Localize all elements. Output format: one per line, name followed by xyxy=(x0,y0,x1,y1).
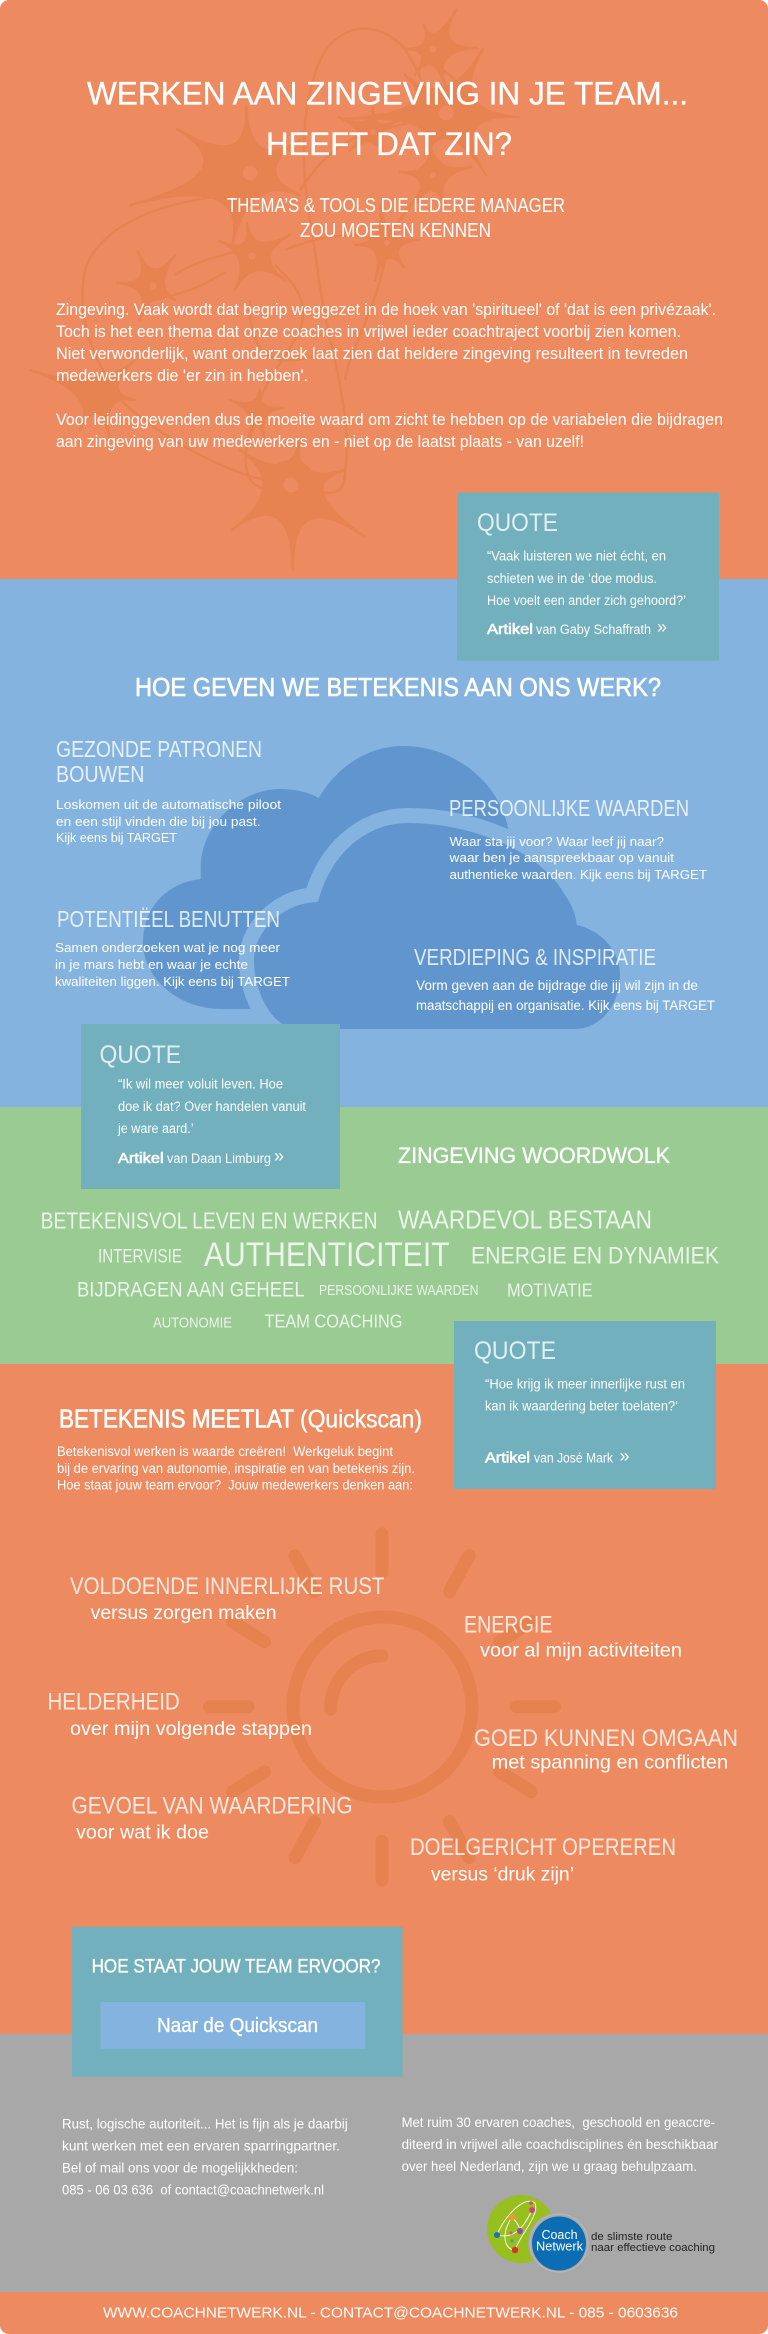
text: right column: Met ruim 30 ervaren coaches, geschoold en geaccre- xyxy=(402,2114,715,2130)
item: helderheid xyxy=(49,1693,311,1739)
quote box 3: kan ik waardering beter toelaten?’ xyxy=(485,1399,678,1414)
title xyxy=(86,82,686,156)
quote box 1: schieten we in de ‘doe modus. xyxy=(487,571,657,586)
quote box 3: van José Mark xyxy=(534,1451,613,1466)
text: right column: over heel Nederland, zijn we u graag behulpzaam. xyxy=(402,2158,697,2174)
item: helderheid: over mijn volgende stappen xyxy=(70,1718,312,1740)
panel: betekenis xyxy=(0,579,768,1107)
word cloud: MOTIVATIE xyxy=(507,1280,593,1301)
quote box 3: Artikel xyxy=(485,1451,530,1467)
item: potentieel benutten: Samen onderzoeken wat je nog meer xyxy=(55,940,281,955)
intro text xyxy=(57,1444,415,1493)
intro text xyxy=(56,301,723,451)
call to action box xyxy=(72,1927,402,2077)
item: spanning xyxy=(475,1729,736,1772)
item: gezonde patronen: Kijk eens bij TARGET xyxy=(56,830,177,845)
subtitle xyxy=(227,198,564,237)
panel: intro xyxy=(0,0,768,579)
item: gezonde patronen: BOUWEN xyxy=(56,761,144,787)
item: persoonlijke waarden: PERSOONLIJKE WAARDEN xyxy=(449,795,689,821)
item: doelgericht: versus ‘druk zijn’ xyxy=(431,1864,574,1886)
heading: (Quickscan) xyxy=(300,1406,422,1434)
item: energie xyxy=(466,1616,681,1660)
heading: BETEKENIS MEETLAT xyxy=(59,1406,294,1434)
intro text: Zingeving. Vaak wordt dat begrip weggezet in de hoek van 'spiritueel' of 'dat is een privézaak'. xyxy=(56,301,716,319)
icon: sun xyxy=(210,1534,554,1880)
item: gezonde patronen: en een stijl vinden die bij jou past. xyxy=(56,814,260,829)
word cloud xyxy=(41,1205,719,1332)
quote box 1: van Gaby Schaffrath xyxy=(536,622,651,637)
word cloud: BIJDRAGEN AAN GEHEEL xyxy=(77,1279,305,1302)
quote box 1 xyxy=(457,492,719,661)
item: persoonlijke waarden: Waar sta jij voor? Waar leef jij naar? xyxy=(450,834,664,849)
word cloud: ENERGIE EN DYNAMIEK xyxy=(471,1243,719,1270)
panel: contact xyxy=(0,2034,768,2292)
panel: woordwolk xyxy=(0,1107,768,1364)
call to action box: HOE STAAT JOUW TEAM ERVOOR? xyxy=(92,1956,381,1978)
logo: naar effectieve coaching xyxy=(591,2242,715,2254)
item: innerlijke rust: VOLDOENDE INNERLIJKE RUST xyxy=(70,1573,385,1600)
intro text: Niet verwonderlijk, want onderzoek laat zien dat heldere zingeving resulteert in tevreden xyxy=(56,345,688,363)
quote box 3: “Hoe krijg ik meer innerlijke rust en xyxy=(485,1377,685,1392)
word cloud: AUTHENTICITEIT xyxy=(204,1236,450,1274)
word cloud: TEAM COACHING xyxy=(264,1311,402,1332)
heading: ZINGEVING WOORDWOLK xyxy=(398,1143,670,1168)
item: energie: voor al mijn activiteiten xyxy=(480,1639,682,1661)
quote box 2: Artikel xyxy=(118,1151,164,1167)
quote box 1: Artikel xyxy=(487,622,533,638)
button: Naar de Quickscan xyxy=(157,2015,318,2037)
subtitle: ZOU MOETEN KENNEN xyxy=(300,220,491,242)
item: gezonde patronen: Loskomen uit de automatische piloot xyxy=(56,797,281,812)
text: left column: Bel of mail ons voor de mogelijkkheden: xyxy=(62,2159,298,2175)
text: left column: kunt werken met een ervaren sparringpartner. xyxy=(62,2137,340,2153)
subtitle: THEMA’S & TOOLS DIE IEDERE MANAGER xyxy=(227,195,565,217)
item: persoonlijke waarden: waar ben je aanspreekbaar op vanuit xyxy=(448,850,674,865)
word cloud: WAARDEVOL BESTAAN xyxy=(398,1205,652,1235)
intro text: bij de ervaring van autonomie, inspiratie en van betekenis zijn. xyxy=(57,1461,415,1476)
item: waardering: voor wat ik doe xyxy=(76,1822,209,1844)
word cloud: INTERVISIE xyxy=(98,1246,182,1268)
item: verdieping en inspiratie: Vorm geven aan de bijdrage die jij wil zijn in de xyxy=(416,977,698,993)
quote box 2: QUOTE xyxy=(100,1041,181,1069)
item: helderheid: HELDERHEID xyxy=(48,1688,180,1715)
text: right column xyxy=(402,2114,718,2174)
logo: de slimste route xyxy=(591,2231,672,2243)
intro text: Voor leidinggevenden dus de moeite waard om zicht te hebben op de variabelen die bijdragen xyxy=(56,411,723,429)
quote box 2: van Daan Limburg xyxy=(167,1151,271,1166)
quote box 3 xyxy=(454,1321,716,1489)
item: waardering: GEVOEL VAN WAARDERING xyxy=(72,1793,353,1820)
text: left column: Rust, logische autoriteit... Het is fijn als je daarbij xyxy=(62,2115,348,2131)
item: gezonde patronen xyxy=(56,736,281,845)
word cloud: AUTONOMIE xyxy=(153,1316,232,1332)
text: left column: 085 - 06 03 636 of contact@coachnetwerk.nl xyxy=(62,2181,324,2197)
item: verdieping en inspiratie: VERDIEPING & INSPIRATIE xyxy=(414,944,656,970)
item: doelgericht: DOELGERICHT OPEREREN xyxy=(410,1834,676,1861)
item: spanning: met spanning en conflicten xyxy=(492,1751,728,1773)
item: potentieel benutten: POTENTIËEL BENUTTEN xyxy=(57,906,280,932)
heading: HOE GEVEN WE BETEKENIS AAN ONS WERK? xyxy=(135,672,661,702)
icon: cloud xyxy=(143,746,620,1029)
button xyxy=(100,2002,365,2049)
intro text: aan zingeving van uw medewerkers en - niet op de laatst plaats - van uzelf! xyxy=(56,433,584,451)
footer strip: WWW.COACHNETWERK.NL - CONTACT@COACHNETWERK.NL - 085 - 0603636 xyxy=(103,2305,678,2322)
item: persoonlijke waarden: authentieke waarden. Kijk eens bij TARGET xyxy=(450,867,707,882)
intro text: medewerkers die 'er zin in hebben'. xyxy=(56,367,308,385)
logo: Coach xyxy=(542,2228,578,2242)
title: WERKEN AAN ZINGEVING IN JE TEAM... xyxy=(87,76,688,112)
quote box 1: “Vaak luisteren we niet écht, en xyxy=(487,549,666,564)
quote box 2 xyxy=(81,1024,340,1189)
quote box 3: » xyxy=(620,1446,630,1466)
item: persoonlijke waarden xyxy=(448,795,707,882)
title: HEEFT DAT ZIN? xyxy=(266,126,512,162)
intro text: Toch is het een thema dat onze coaches in vrijwel ieder coachtraject voorbij zien komen. xyxy=(56,323,681,341)
item: potentieel benutten xyxy=(55,906,290,989)
item: doelgericht xyxy=(412,1838,674,1884)
neuron background illustration xyxy=(30,10,519,570)
quote box 1: Hoe voelt een ander zich gehoord?’ xyxy=(487,593,686,608)
text: right column: diteerd in vrijwel alle coachdisciplines én beschikbaar xyxy=(402,2136,718,2152)
intro text: Betekenisvol werken is waarde creëren! Werkgeluk begint xyxy=(57,1444,393,1459)
quote box 2: “Ik wil meer voluit leven. Hoe xyxy=(118,1077,283,1092)
quote box 1: QUOTE xyxy=(477,509,558,537)
logo xyxy=(487,2195,715,2274)
quote box 2: je ware aard.’ xyxy=(117,1121,194,1136)
item: waardering xyxy=(72,1796,352,1838)
logo: Netwerk xyxy=(536,2240,584,2254)
quote box 1: » xyxy=(657,617,667,637)
word cloud: PERSOONLIJKE WAARDEN xyxy=(319,1283,478,1299)
item: verdieping en inspiratie: maatschappij en organisatie. Kijk eens bij TARGET xyxy=(416,997,715,1013)
text: left column xyxy=(62,2115,348,2197)
item: potentieel benutten: in je mars hebt en waar je echte xyxy=(55,957,248,972)
heading xyxy=(60,1409,421,1433)
quote box 3: QUOTE xyxy=(474,1337,556,1365)
item: potentieel benutten: kwaliteiten liggen. Kijk eens bij TARGET xyxy=(55,974,290,989)
word cloud: BETEKENISVOL LEVEN EN WERKEN xyxy=(41,1208,378,1234)
item: innerlijke rust xyxy=(70,1573,385,1624)
item: gezonde patronen: GEZONDE PATRONEN xyxy=(56,736,262,762)
footer strip xyxy=(0,2292,768,2334)
item: energie: ENERGIE xyxy=(464,1611,552,1638)
item: innerlijke rust: versus zorgen maken xyxy=(91,1602,277,1624)
item: verdieping en inspiratie xyxy=(414,944,715,1013)
intro text: Hoe staat jouw team ervoor? Jouw medewerkers denken aan: xyxy=(57,1478,413,1493)
quote box 2: doe ik dat? Over handelen vanuit xyxy=(118,1099,306,1114)
panel: meetlat xyxy=(0,1364,768,2034)
item: spanning: GOED KUNNEN OMGAAN xyxy=(474,1725,738,1752)
quote box 2: » xyxy=(274,1146,284,1166)
